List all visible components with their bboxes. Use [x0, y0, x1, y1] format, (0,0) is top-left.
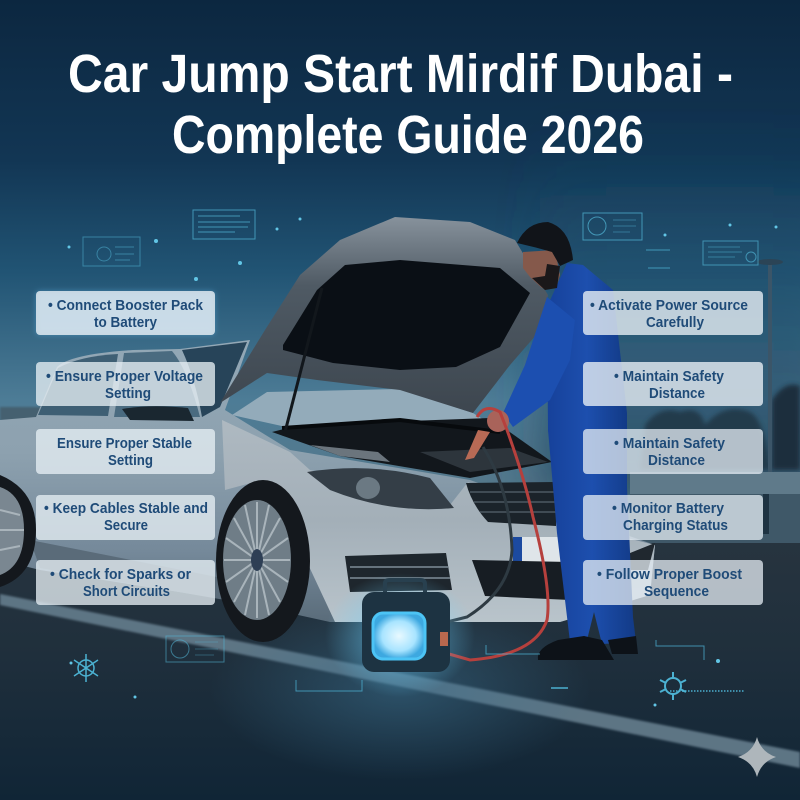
card: Follow Proper Boost: Sequence — [644, 583, 709, 600]
icon: circuit node left — [74, 654, 98, 682]
card: Check for Sparks: Short Circuits — [83, 583, 170, 600]
card: Check for Sparks — [36, 560, 215, 605]
right info cards — [583, 291, 763, 605]
card: Ensure Proper Voltage: Setting — [105, 385, 151, 402]
card: Maintain Safety Distance repeat: • Maintain Safety — [614, 435, 726, 452]
front wheel — [216, 480, 310, 642]
hood underside — [283, 260, 530, 370]
floor glow — [210, 600, 590, 780]
card: Activate Power Source: Carefully — [646, 314, 705, 331]
mirror — [122, 406, 194, 421]
right sky shade — [540, 120, 800, 500]
card: Keep Cables Stable: Secure — [104, 517, 148, 534]
icon: sparkle watermark — [738, 737, 776, 777]
card: Connect Booster Pack: • Connect Booster Pack — [48, 297, 204, 314]
card: Monitor Battery: Charging Status — [623, 517, 728, 534]
road line — [0, 594, 800, 768]
engine bay — [272, 418, 552, 478]
card: Connect Booster Pack — [36, 291, 215, 335]
boots — [538, 636, 614, 660]
number plate — [513, 537, 563, 562]
hand — [487, 410, 509, 432]
lower sill — [30, 540, 225, 600]
card: Ensure Proper Stable — [36, 429, 215, 474]
card: Maintain Safety Distance: • Maintain Safety — [614, 368, 725, 385]
car body — [0, 340, 655, 622]
HUD panel: top right icon — [583, 213, 642, 240]
windshield — [232, 389, 500, 430]
card: Maintain Safety Distance repeat: Distance — [648, 452, 705, 469]
card: Ensure Proper Stable: Ensure Proper Stable — [57, 435, 192, 452]
distant horizon left — [0, 407, 70, 421]
HUD panel: top centre left — [193, 210, 255, 239]
HUD panel: top left — [83, 237, 140, 266]
open hood — [220, 217, 548, 436]
HUD accent lines — [296, 250, 745, 691]
card: Monitor Battery: • Monitor Battery — [612, 500, 725, 517]
card: Connect Booster Pack: to Battery — [94, 314, 158, 331]
card: Ensure Proper Stable: Setting — [108, 452, 153, 469]
torso — [547, 263, 627, 470]
card: Keep Cables Stable: • Keep Cables Stable and — [44, 500, 208, 517]
card: Maintain Safety Distance: Distance — [649, 385, 705, 402]
fender and front bumper — [222, 420, 655, 622]
HUD panel: lower left — [166, 636, 224, 662]
rear wheel — [0, 475, 36, 587]
title: Car Jump Start Mirdif Dubai - — [68, 44, 733, 104]
card: Monitor Battery — [583, 495, 763, 540]
card: Maintain Safety Distance — [583, 362, 763, 406]
jumper cables — [442, 408, 548, 660]
head — [523, 250, 560, 288]
ground — [0, 540, 800, 800]
card: Check for Sparks: • Check for Sparks or — [50, 566, 191, 583]
floating particles — [68, 218, 778, 706]
title: Complete Guide 2026 — [172, 105, 644, 165]
arm — [503, 297, 575, 427]
card: Ensure Proper Voltage — [36, 362, 215, 406]
grille — [466, 482, 556, 526]
booster pack — [325, 573, 475, 697]
legs — [548, 413, 636, 644]
card: Activate Power Source: • Activate Power Source — [590, 297, 748, 314]
card: Maintain Safety Distance repeat — [583, 429, 763, 474]
card: Follow Proper Boost: • Follow Proper Boost — [597, 566, 742, 583]
guardrail — [630, 472, 800, 543]
lower intakes — [345, 553, 452, 592]
title — [68, 44, 733, 165]
side windows — [38, 354, 118, 416]
card: Follow Proper Boost — [583, 560, 763, 605]
card: Ensure Proper Voltage: • Ensure Proper Voltage — [46, 368, 203, 385]
left info cards — [36, 291, 215, 605]
card: Keep Cables Stable — [36, 495, 215, 540]
icon: circuit node right — [660, 672, 686, 700]
HUD panel: far right — [703, 241, 758, 265]
hood prop rod — [284, 288, 322, 436]
background scenery: street lamp and palms — [640, 259, 800, 476]
headlight — [307, 468, 454, 509]
mechanic — [487, 222, 638, 660]
card: Activate Power Source — [583, 291, 763, 335]
